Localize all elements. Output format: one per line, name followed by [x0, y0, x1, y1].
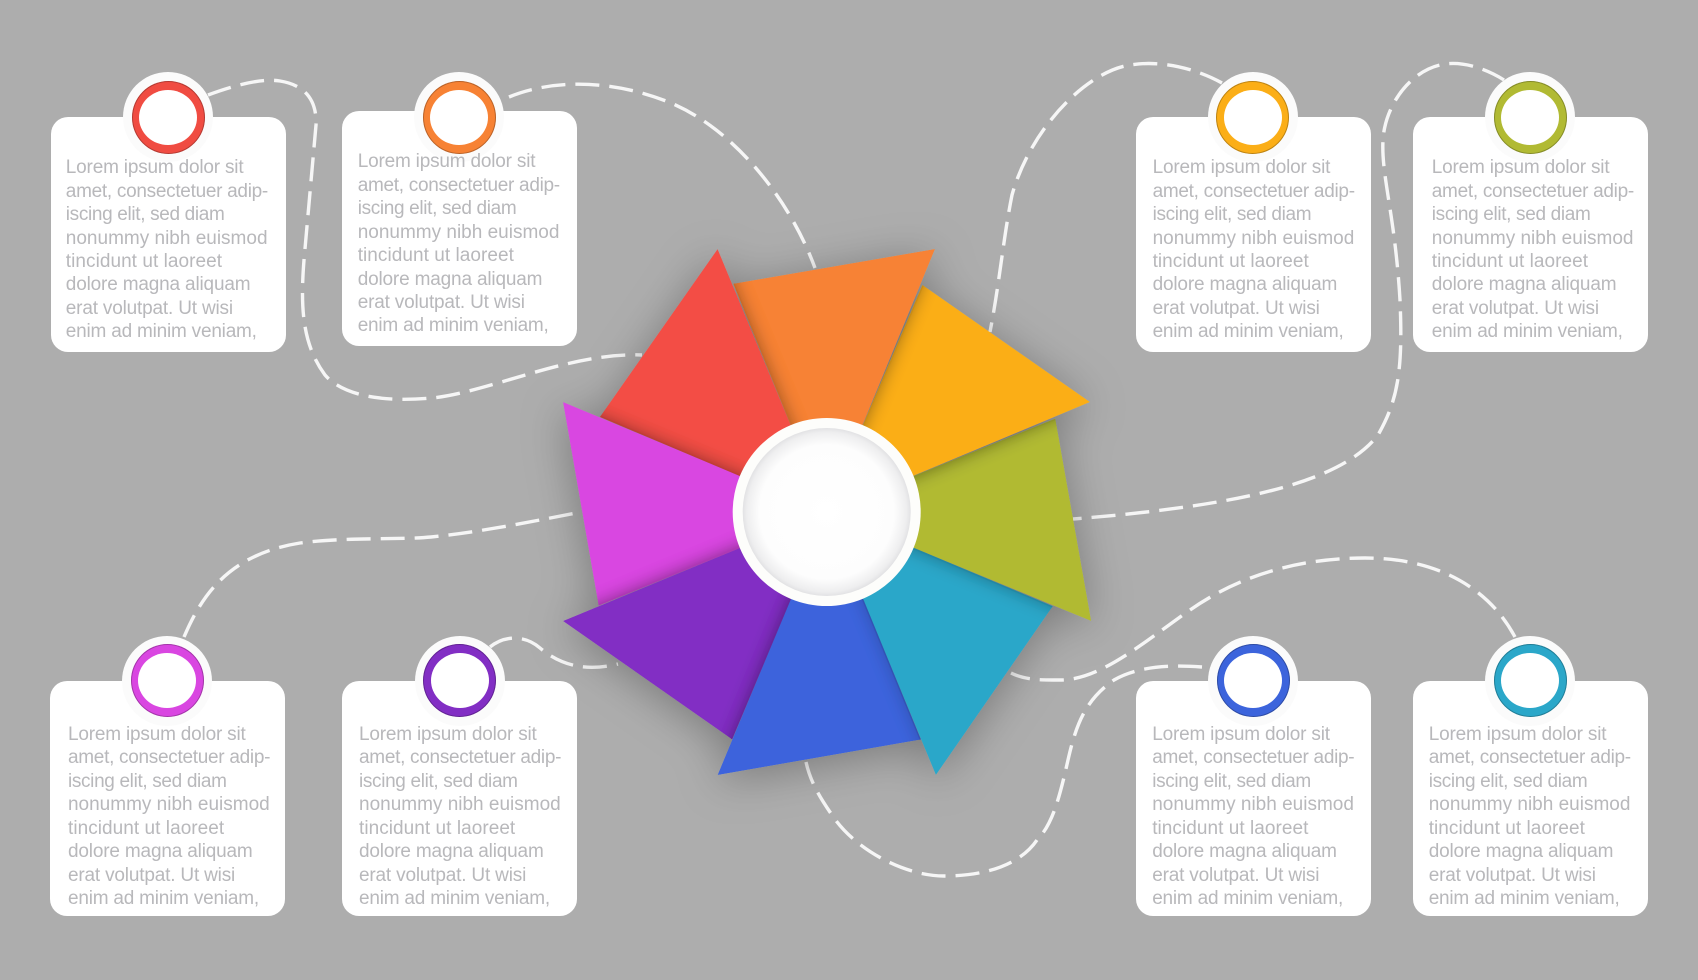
text block: erat volutpat. Ut wisi	[68, 865, 235, 886]
chart: dashed connectors and pinwheel	[182, 62, 1516, 878]
connector: yellow card to yellow blade	[990, 64, 1222, 332]
text block: iscing elit, sed diam	[1432, 204, 1590, 225]
text block: enim ad minim veniam,	[1152, 888, 1343, 909]
center disc	[733, 418, 921, 606]
text block: erat volutpat. Ut wisi	[1152, 865, 1319, 886]
text block: nonummy nibh euismod	[1432, 228, 1634, 249]
text block: iscing elit, sed diam	[358, 198, 516, 219]
icon: card halo	[123, 72, 213, 162]
text block: Lorem ipsum dolor sit	[1152, 724, 1330, 745]
text block: dolore magna aliquam	[1153, 274, 1337, 295]
text block: Lorem ipsum dolor sit	[1153, 157, 1330, 178]
blade: yellow	[862, 284, 1090, 476]
text block: Lorem ipsum dolor sit	[68, 724, 246, 745]
blade: teal	[863, 549, 1059, 780]
text block: dolore magna aliquam	[68, 841, 253, 862]
panel: purple card	[342, 681, 577, 916]
text block	[1152, 157, 1355, 342]
panel: teal card	[1413, 681, 1648, 916]
connector: teal card to teal blade	[1011, 558, 1515, 680]
text block: tincidunt ut laoreet	[68, 818, 224, 839]
text block	[1432, 157, 1634, 342]
text block: enim ad minim veniam,	[358, 315, 549, 336]
text block: iscing elit, sed diam	[1153, 204, 1311, 225]
text block: enim ad minim veniam,	[1153, 321, 1344, 342]
text block: iscing elit, sed diam	[68, 771, 227, 792]
text block: iscing elit, sed diam	[1429, 771, 1587, 792]
text block: nonummy nibh euismod	[68, 794, 270, 815]
panel: olive card	[1413, 117, 1648, 352]
text block	[68, 724, 270, 909]
pinwheel	[563, 249, 1091, 775]
text block: enim ad minim veniam,	[359, 888, 550, 909]
text block: tincidunt ut laoreet	[1152, 818, 1308, 839]
icon: card halo	[1208, 72, 1298, 162]
icon: card halo	[1485, 72, 1575, 162]
text block: amet, consectetuer adip-	[1432, 181, 1634, 202]
connector: orange card to orange blade	[509, 84, 815, 268]
blade: blue	[708, 599, 924, 794]
icon: orange ring	[423, 81, 496, 154]
text block: tincidunt ut laoreet	[1429, 818, 1585, 839]
text block	[359, 724, 561, 909]
text block: nonummy nibh euismod	[1152, 794, 1354, 815]
text block: tincidunt ut laoreet	[358, 245, 514, 266]
text block: nonummy nibh euismod	[359, 794, 561, 815]
text block	[358, 151, 560, 336]
icon: card halo	[1485, 636, 1575, 726]
text block: Lorem ipsum dolor sit	[359, 724, 537, 745]
text block: iscing elit, sed diam	[66, 204, 224, 225]
text block: tincidunt ut laoreet	[1153, 251, 1309, 272]
text block: nonummy nibh euismod	[66, 228, 268, 249]
text block: amet, consectetuer adip-	[1152, 747, 1354, 768]
text block: amet, consectetuer adip-	[1429, 747, 1631, 768]
blade: olive	[914, 418, 1104, 636]
text block: Lorem ipsum dolor sit	[66, 157, 243, 178]
icon: magenta ring	[131, 644, 204, 717]
icon: yellow ring	[1216, 81, 1289, 154]
text block: amet, consectetuer adip-	[359, 747, 561, 768]
connector: blue card to blue blade	[806, 666, 1202, 876]
text block: Lorem ipsum dolor sit	[358, 151, 535, 172]
panel: red card	[50, 117, 286, 352]
text block: nonummy nibh euismod	[1153, 228, 1354, 249]
icon: card halo	[1208, 636, 1298, 726]
icon: red ring	[132, 81, 204, 154]
panel: orange card	[342, 111, 577, 346]
text block: iscing elit, sed diam	[1152, 771, 1311, 792]
text block: dolore magna aliquam	[1429, 841, 1613, 862]
blade: magenta	[550, 399, 740, 610]
text block: iscing elit, sed diam	[359, 771, 518, 792]
text block: enim ad minim veniam,	[68, 888, 259, 909]
icon: card halo	[414, 636, 504, 726]
text block: amet, consectetuer adip-	[358, 175, 560, 196]
connector: purple card to purple blade	[490, 638, 618, 667]
icon: purple ring	[423, 644, 496, 717]
text block: nonummy nibh euismod	[358, 222, 559, 243]
icon: card halo	[414, 72, 504, 162]
text block	[66, 157, 268, 342]
text block: erat volutpat. Ut wisi	[359, 865, 526, 886]
text block: dolore magna aliquam	[1432, 274, 1616, 295]
text block: tincidunt ut laoreet	[1432, 251, 1588, 272]
text block: dolore magna aliquam	[358, 269, 542, 290]
text block: tincidunt ut laoreet	[359, 818, 515, 839]
text block: erat volutpat. Ut wisi	[1153, 298, 1320, 319]
text block: amet, consectetuer adip-	[68, 747, 270, 768]
icon: blue ring	[1217, 644, 1290, 717]
text block	[1429, 724, 1631, 909]
text block: dolore magna aliquam	[66, 274, 250, 295]
icon: olive ring	[1494, 81, 1567, 154]
icon: teal ring	[1494, 644, 1567, 717]
text block: nonummy nibh euismod	[1429, 794, 1630, 815]
blade: red	[594, 249, 790, 475]
text block: Lorem ipsum dolor sit	[1432, 157, 1609, 178]
text block: amet, consectetuer adip-	[1153, 181, 1355, 202]
panel: blue card	[1136, 681, 1371, 916]
text block: dolore magna aliquam	[1152, 841, 1337, 862]
text block: enim ad minim veniam,	[1429, 888, 1620, 909]
text block: erat volutpat. Ut wisi	[358, 292, 525, 313]
icon: card halo	[122, 636, 212, 726]
panel: yellow card	[1136, 117, 1371, 352]
text block: dolore magna aliquam	[359, 841, 544, 862]
text block: enim ad minim veniam,	[66, 321, 257, 342]
text block: Lorem ipsum dolor sit	[1429, 724, 1606, 745]
connector: magenta card to magenta blade	[184, 512, 581, 637]
text block: enim ad minim veniam,	[1432, 321, 1623, 342]
connector: olive card to olive blade	[1073, 63, 1504, 519]
connector: red card to red blade	[208, 80, 642, 399]
text block: erat volutpat. Ut wisi	[66, 298, 233, 319]
blade: orange	[732, 242, 944, 425]
text block: tincidunt ut laoreet	[66, 251, 222, 272]
text block: erat volutpat. Ut wisi	[1429, 865, 1596, 886]
text block: erat volutpat. Ut wisi	[1432, 298, 1599, 319]
blade seams	[598, 284, 1055, 740]
text block: amet, consectetuer adip-	[66, 181, 268, 202]
panel: magenta card	[50, 681, 285, 916]
blade: purple	[563, 548, 790, 752]
text block	[1152, 724, 1354, 909]
